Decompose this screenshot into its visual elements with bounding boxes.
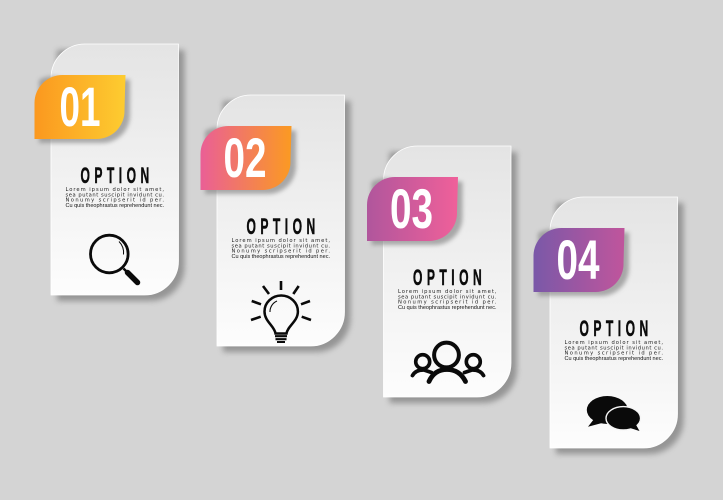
- body text: [564, 340, 663, 362]
- body text: Lorem ipsum dolor sit amet,: [66, 187, 164, 193]
- panel: option 02: [200, 95, 350, 352]
- body text: sea putant suscipit invidunt cu.: [398, 294, 497, 300]
- body text: Lorem ipsum dolor sit amet,: [232, 238, 330, 244]
- body text: Lorem ipsum dolor sit amet,: [398, 289, 497, 295]
- body text: Nonumy scripserit id per.: [232, 249, 330, 255]
- icon: group of people: [412, 343, 484, 382]
- body text: Nonumy scripserit id per.: [398, 300, 497, 306]
- card 03: [384, 146, 511, 397]
- tab 03: [367, 177, 458, 241]
- body text: sea putant suscipit invidunt cu.: [232, 243, 330, 249]
- icon: magnifying glass: [90, 235, 138, 282]
- body text: [232, 238, 330, 260]
- card 02: [217, 95, 344, 346]
- number 03: 03: [390, 177, 433, 240]
- icon: speech bubbles: [587, 396, 641, 431]
- panel: option 01: [34, 44, 184, 301]
- tab 01: [34, 75, 126, 139]
- number 04: 04: [556, 228, 600, 291]
- icon: light bulb: [251, 281, 311, 342]
- panel: option 04: [534, 197, 684, 454]
- heading: OPTION: [413, 265, 482, 290]
- body text: sea putant suscipit invidunt cu.: [564, 345, 663, 351]
- body text: Cu quis theophrastus reprehendunt nec.: [564, 356, 663, 362]
- body text: [66, 187, 164, 209]
- card 01: [51, 44, 178, 295]
- body text: Lorem ipsum dolor sit amet,: [564, 340, 663, 346]
- body text: Cu quis theophrastus reprehendunt nec.: [398, 305, 497, 311]
- heading: OPTION: [580, 316, 648, 341]
- body text: Nonumy scripserit id per.: [66, 198, 164, 204]
- heading: OPTION: [246, 214, 315, 239]
- body text: sea putant suscipit invidunt cu.: [66, 192, 164, 198]
- body text: Cu quis theophrastus reprehendunt nec.: [232, 254, 330, 260]
- number 02: 02: [224, 126, 266, 189]
- body text: [398, 289, 497, 311]
- body text: Cu quis theophrastus reprehendunt nec.: [66, 203, 164, 209]
- card 04: [550, 197, 678, 448]
- number 01: 01: [60, 75, 100, 138]
- heading: OPTION: [80, 163, 149, 188]
- tab 04: [534, 228, 624, 292]
- tab 02: [200, 126, 292, 190]
- panel: option 03: [367, 146, 517, 403]
- body text: Nonumy scripserit id per.: [564, 351, 663, 357]
